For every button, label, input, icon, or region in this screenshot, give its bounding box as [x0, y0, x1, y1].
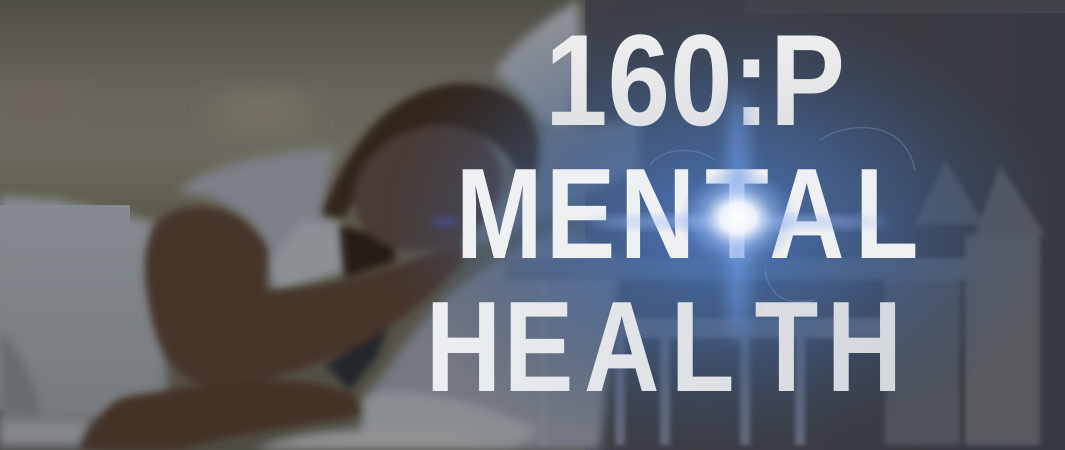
sleeping woman — [80, 83, 540, 450]
title line: MENTAL: MENTAL — [456, 142, 919, 285]
faint brain outline — [650, 128, 915, 302]
hair — [322, 83, 540, 218]
bed, blanket and pillows — [0, 0, 640, 450]
blue light glow — [380, 0, 1060, 450]
face — [335, 104, 521, 272]
lower arm and hand — [80, 381, 360, 450]
neck shadow — [340, 225, 395, 278]
lens flare star — [588, 90, 888, 340]
lips glow — [431, 218, 459, 226]
title line: HEALTH: HEALTH — [426, 275, 902, 418]
arm — [145, 207, 463, 390]
shadow under arm — [325, 325, 390, 390]
right side cot and furniture — [505, 160, 1045, 445]
title line: 160:P: 160:P — [545, 7, 845, 153]
